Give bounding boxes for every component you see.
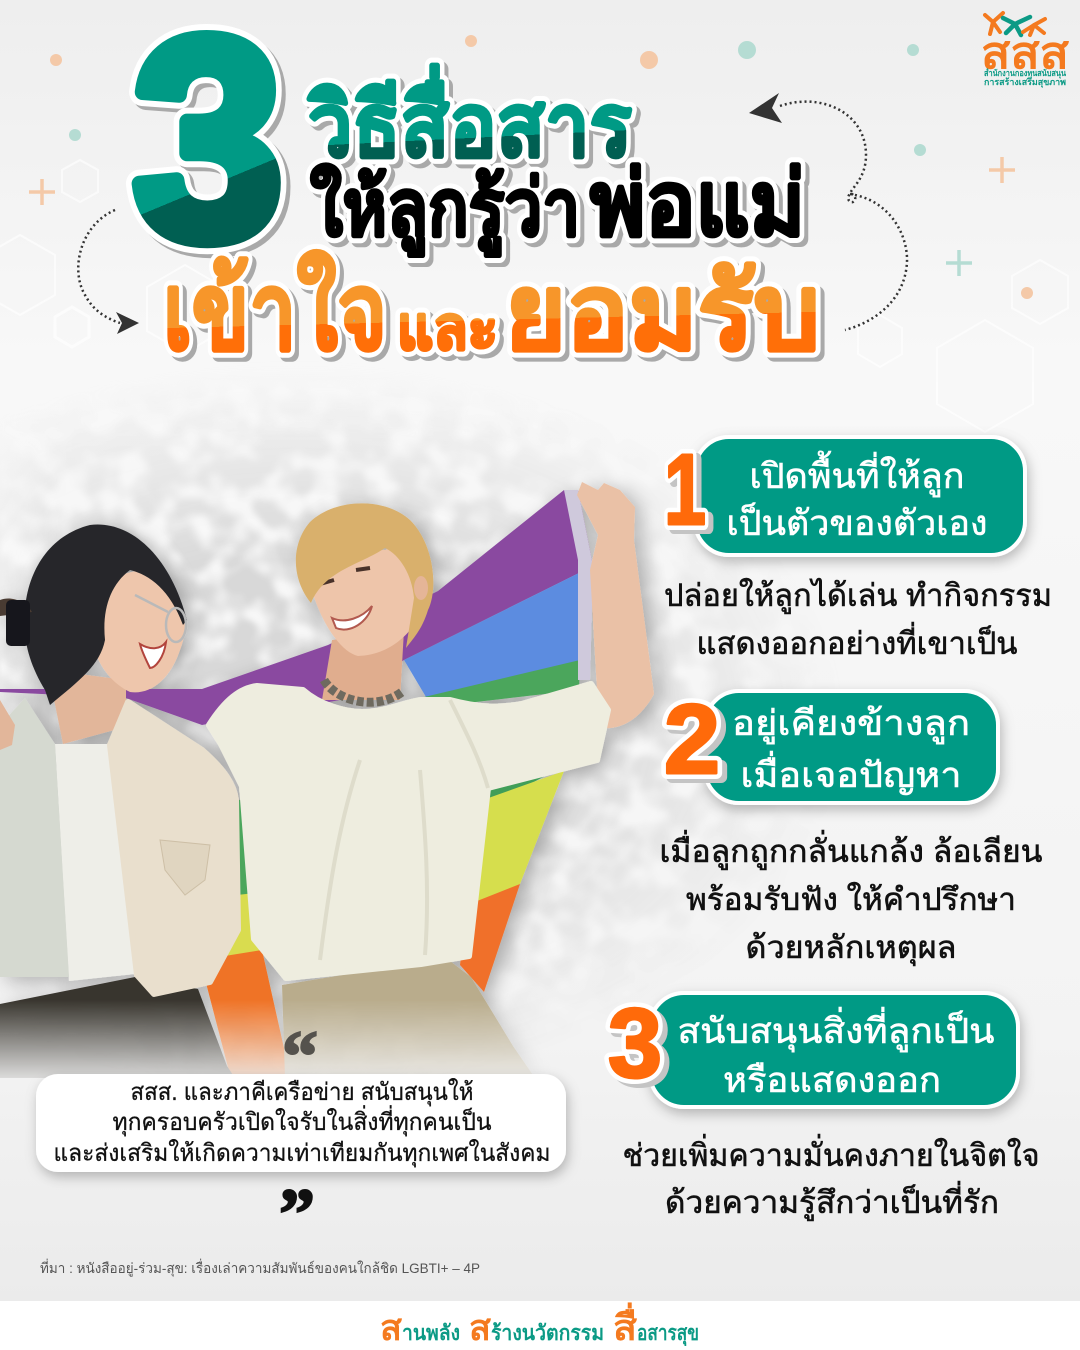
logo: ThaiHealth [981,13,1069,88]
woman: white tee [55,744,135,981]
man: beaded necklace [324,680,402,702]
man: khaki trousers [282,958,535,1078]
pill 2 [705,691,998,803]
man: arm [577,482,654,728]
arrow: left dotted curve [78,210,120,323]
woman: ponytail [0,598,32,616]
man: face [314,548,414,656]
man: blond hair [296,503,433,648]
title line 2: ให้ลูกรู้ว่า [310,163,580,257]
pill 3 line 1: สนับสนุนสิ่งที่ลูกเป็น [678,1007,995,1052]
woman: hand on shoulder [0,700,15,750]
footer slogan 2: ร้างนวัตกรรม [491,1321,604,1345]
quote line 2: ทุกครอบครัวเปิดใจรับในสิ่งที่ทุกคนเป็น [112,1105,492,1137]
footer slogan 3: อสารสุข [637,1322,699,1347]
pill 2 line 1: อยู่เคียงข้างลูก [732,704,970,744]
woman: smile [140,642,166,668]
title [133,0,820,372]
footer slogan 2: ส [469,1307,491,1348]
footer slogan 2 [469,1307,604,1348]
footer slogan 1: านพลัง [402,1322,460,1345]
title line 3 middle: และ [397,295,498,362]
pill 2 line 2: เมื่อเจอปัญหา [740,751,962,795]
body 1 line 1: ปล่อยให้ลูกได้เล่น ทำกิจกรรม [664,578,1052,614]
footer [0,1301,1080,1350]
quote line 1: สสส. และภาคีเครือข่าย สนับสนุนให้ [130,1078,474,1107]
decorative hexagons and dots [0,35,1068,432]
source: ที่มา : หนังสืออยู่-ร่วม-สุข: เรื่องเล่าความสัมพันธ์ของคนใกล้ชิด LGBTI+ – 4P [40,1259,480,1277]
title line 3 left: เข้าใจ [163,251,387,372]
number 3: 3 [608,988,662,1098]
body 2 line 3: ด้วยหลักเหตุผล [746,930,956,967]
number 3: 3 [608,988,662,1098]
woman: hair [24,525,187,705]
number 1: 1 [664,434,706,546]
woman: face [89,570,185,692]
quote mark close: ” [279,1174,315,1254]
logo caption second line: การสร้างเสริมสุขภาพ [984,77,1066,88]
footer slogan 1 [380,1307,460,1348]
body 3 line 1: ช่วยเพิ่มความมั่นคงภายในจิตใจ [622,1134,1040,1173]
man: ear and earring [414,576,428,600]
arrow: top right dotted curve [780,102,907,330]
title line 1: วิธีสื่อสาร [307,64,632,175]
title line 3 middle: และ [397,295,498,362]
footer slogan 3: สื่ [613,1302,637,1348]
panel: tip 3 [608,988,1040,1221]
woman: pale jacket side [0,698,69,977]
man: tee fold shading [320,700,488,960]
title line 3 right: ยอมรับ [505,254,820,372]
icon: three star figures [985,13,1045,35]
number 2: 2 [664,684,720,794]
body 2 line 1: เมื่อลูกถูกกลั่นแกล้ง ล้อเลียน [660,830,1042,870]
number 1: 1 [664,434,706,546]
footer slogan 1: ส [380,1307,402,1348]
number 2: 2 [664,684,720,794]
man: white tee [209,684,608,978]
woman: trousers [0,977,235,1078]
rainbow flag [0,490,593,1075]
panel: tip 2 [660,684,1042,967]
pill 3 [650,993,1018,1107]
woman: jacket pocket [160,840,210,895]
panel: tip 1 [664,434,1052,661]
man: smile [332,606,372,630]
logo wordmark: สสส [981,29,1069,78]
photo: two people with rainbow flag [0,482,654,1078]
title line 3 left: เข้าใจ [163,251,387,372]
pill 1 [695,437,1025,555]
body 1 line 2: แสดงออกอย่างที่เขาเป็น [696,622,1018,661]
body 3 line 2: ด้วยความรู้สึกว่าเป็นที่รัก [665,1181,999,1221]
footer slogan 3 [613,1302,699,1348]
title line 3 right: ยอมรับ [505,254,820,372]
pill 3 line 2: หรือแสดงออก [723,1061,941,1100]
woman: glasses [135,595,186,642]
arrowhead: left [116,312,139,334]
woman: hair clip [6,600,30,646]
pill 1 line 1: เปิดพื้นที่ให้ลูก [750,450,964,497]
title line 2 emphasis: พ่อแม่ [590,155,805,255]
pill 1 line 2: เป็นตัวของตัวเอง [726,502,988,543]
arrowhead: top right [749,93,782,123]
woman: neck [48,670,126,744]
title line 2 emphasis: พ่อแม่ [590,155,805,255]
woman: cream jacket [110,702,238,994]
title line 1: วิธีสื่อสาร [307,64,632,175]
quote box [36,1074,566,1172]
title line 2: ให้ลูกรู้ว่า [310,163,580,257]
quote line 3: และส่งเสริมให้เกิดความเท่าเทียมกันทุกเพศในสังคม [54,1139,550,1168]
quote mark open: “ [282,1016,318,1096]
body 2 line 2: พร้อมรับฟัง ให้คำปรึกษา [686,882,1016,917]
man: neck [322,630,404,700]
man: eyes [320,568,370,584]
grey bokeh backdrop [0,414,740,1008]
